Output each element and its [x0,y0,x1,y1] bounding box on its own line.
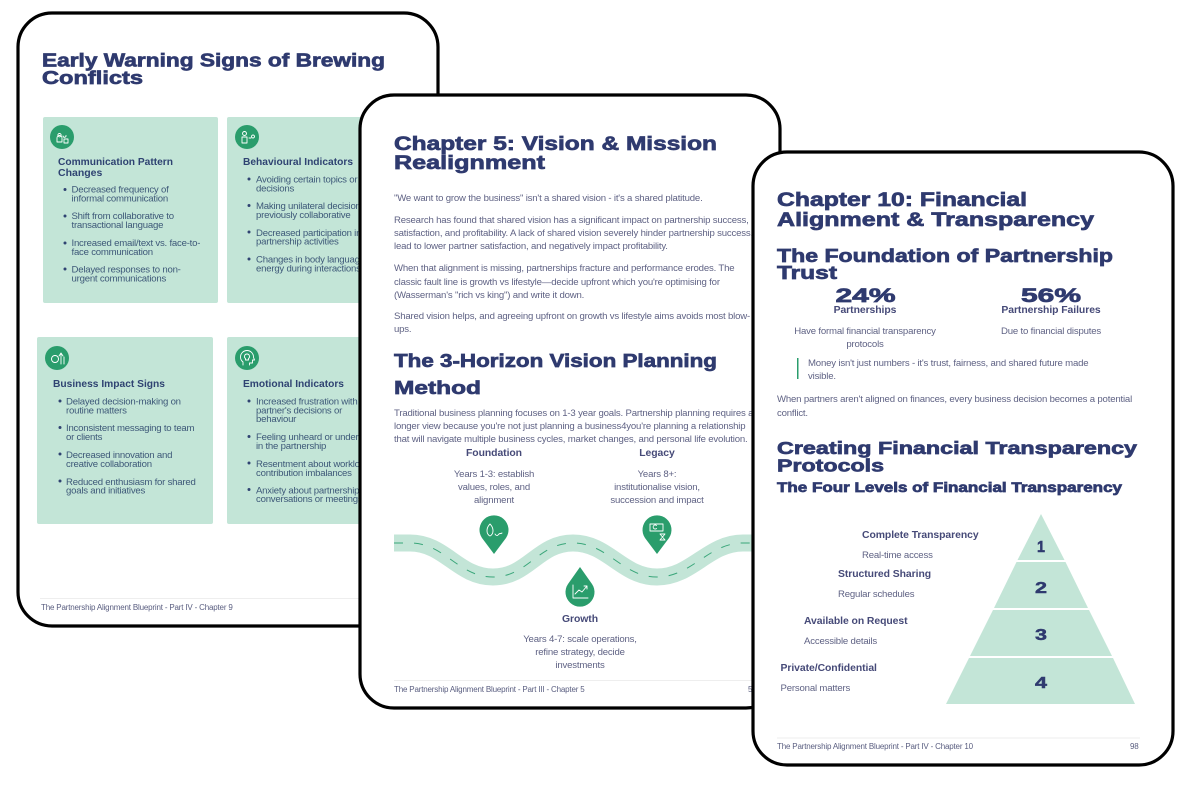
list: behavioural signs [256,174,366,274]
callout: money quote [797,358,1088,382]
title: Early Warning Signs: Conflicts [42,67,143,88]
text block: introduction paragraphs: classic fault line is growth vs lifestyle—decide upfront which you're optimising for [394,277,721,288]
footer: page 3: The Partnership Alignment Blueprint - Part IV - Chapter 10 [777,742,974,751]
footer: page 3: 98 [1130,742,1139,751]
list: business impact signs: goals and initiatives [66,486,146,496]
chart: transparency pyramid: 3 [1035,627,1047,644]
milestone: Legacy [610,448,704,554]
title: Chapter 10 [777,189,1094,231]
list: business impact signs: routine matters [66,406,127,416]
text block: planning method: Traditional business planning focuses on 1-3 year goals. Partnership planning requires a [394,408,754,419]
list: business impact signs: or clients [66,432,103,443]
milestone: Legacy: succession and impact [610,495,704,506]
milestone: Growth: Years 4-7: scale operations, [523,634,637,645]
chart: transparency pyramid: 2 [1035,580,1047,597]
milestone: Foundation [454,448,534,554]
heading: Foundation of Partnership Trust [777,245,1113,283]
label: level 1: Complete Transparency [862,530,979,541]
milestone: Foundation: Foundation [466,448,522,459]
label: level 2: Regular schedules [838,589,915,600]
list: behavioural signs: Making unilateral decisions [256,201,366,212]
icon: coin and arrow [45,346,69,370]
label: level 2 [838,569,931,600]
label: level 4: Personal matters [780,683,851,694]
stat: 56% partnership failures: Due to financial disputes [1001,326,1101,337]
list: communication signs: face communication [72,247,153,258]
list: emotional signs: Resentment about workload [256,459,370,470]
milestone: Growth [523,567,637,671]
title: Early Warning Signs [42,50,385,88]
text block: introduction paragraphs: (Wasserman's "rich vs king") and write it down. [394,290,584,301]
label: level 1 [862,530,979,561]
stat: 24% partnerships [794,285,936,350]
footer: page 2: 58 [748,685,757,694]
list: communication signs: Shift from collaborative to [72,211,174,222]
card: Business Impact Signs [37,337,213,524]
text block: finance alignment [777,394,1132,419]
footer: page 1: The Partnership Alignment Blueprint - Part IV - Chapter 9 [41,603,233,612]
stat: 24% partnerships: Have formal financial transparency [794,326,936,337]
panel: page 3, Chapter 10 Financial Alignment [753,152,1173,765]
list: communication signs: Delayed responses to non- [72,264,181,276]
card: Emotional Indicators [227,337,403,524]
chart: transparency pyramid [946,514,1135,704]
icon: person with gear [235,125,259,149]
title: Chapter 5: Chapter 5: Vision & Mission [394,133,717,155]
list: emotional signs [256,396,385,505]
list: communication signs: informal communication [72,194,168,204]
heading: 3-Horizon method: Method [394,377,481,398]
chart: transparency pyramid: 4 [1035,675,1047,692]
callout: money quote: Money isn't just numbers - it's trust, fairness, and shared future made [808,358,1088,369]
card: Behavioural Indicators [227,117,403,303]
list: behavioural signs: previously collaborative [256,210,350,221]
heading: 3-Horizon method: The 3-Horizon Vision Planning [394,350,717,371]
list: emotional signs: Increased frustration with [256,396,357,408]
list: emotional signs: Feeling unheard or undervalued [256,432,385,443]
stat: 24% partnerships: Partnerships [834,305,897,316]
milestone: Growth: refine strategy, decide [535,647,625,658]
card: Communication Pattern Changes: Communication Pattern [58,156,173,168]
milestone: Growth: Growth [562,614,598,625]
milestone: Legacy: Years 8+: [638,469,676,480]
heading: Foundation of Partnership Trust: The Foundation of Partnership [777,245,1113,266]
list: behavioural signs: energy during interactions [256,264,361,274]
footer: page 2 [394,685,757,694]
card: Business Impact Signs: Business Impact Signs [53,378,165,390]
label: level 3 [804,616,908,647]
footer: page 3 [777,742,1139,751]
milestone: Legacy: Legacy [639,448,675,459]
list: emotional signs: Anxiety about partnership [256,486,359,496]
title: Chapter 10: Chapter 10: Financial [777,189,1027,211]
text block: finance alignment: conflict. [777,408,808,419]
heading: Creating Financial Transparency Protocols [777,438,1137,476]
icon: money and hourglass map pin [642,515,671,554]
chart: winding road timeline [394,543,770,577]
heading: Creating Financial Transparency Protocols: Creating Financial Transparency [777,438,1137,458]
title: Chapter 5 [394,133,717,174]
title: Early Warning Signs: Early Warning Signs of Brewing [42,50,385,71]
label: level 4: Private/Confidential [780,663,877,674]
milestone: Foundation: values, roles, and [458,482,530,493]
footer: page 2: The Partnership Alignment Blueprint - Part III - Chapter 5 [394,685,585,694]
text block: introduction paragraphs: Shared vision helps, and agreeing upfront on growth vs lifestyle aims avoids most blow- [394,311,750,322]
heading: Four Levels: The Four Levels of Financial Transparency [777,480,1123,495]
card: Emotional Indicators: Emotional Indicators [243,378,344,390]
list: communication signs: urgent communications [72,274,166,284]
panel: page 1, Early Warning Signs [18,13,438,626]
text block: planning method: longer view because you're not just planning a business4you're planning a relationship [394,421,745,432]
text block: introduction paragraphs: When that alignment is missing, partnerships fracture and performance erodes. The [394,263,734,274]
list: communication signs: transactional language [72,220,163,231]
title: Chapter 5: Realignment [394,152,546,174]
text block: finance alignment: When partners aren't aligned on finances, every business decision becomes a potential [777,394,1132,405]
text block: introduction paragraphs: "We want to grow the business" isn't a shared vision - it's a shared platitude. [394,193,703,204]
stat: 56% partnership failures: 56% [1021,285,1081,307]
list: emotional signs: partner's decisions or [256,406,343,416]
list: emotional signs: conversations or meetings [256,494,363,505]
list: emotional signs: contribution imbalances [256,468,352,479]
heading: Creating Financial Transparency Protocols: Protocols [777,456,884,476]
list: behavioural signs: Avoiding certain topics or [256,174,358,186]
callout: money quote: visible. [808,371,836,382]
icon: chart droplet [566,567,594,607]
text block: introduction paragraphs: satisfaction, and profitability. A lack of shared vision severely hinder partnership success, [394,228,753,239]
list: behavioural signs: partnership activities [256,236,339,248]
label: level 4 [780,663,877,694]
list: emotional signs: behaviour [256,414,297,425]
card: Behavioural Indicators: Behavioural Indicators [243,156,353,168]
list: emotional signs: in the partnership [256,441,326,452]
list: business impact signs: Decreased innovation and [66,450,172,461]
milestone: Foundation: alignment [474,495,515,506]
list: communication signs: Increased email/text vs. face-to- [72,238,200,249]
card: Communication Pattern Changes [43,117,218,303]
stat: 24% partnerships: 24% [836,285,896,307]
stat: 56% partnership failures: Partnership Failures [1001,305,1101,316]
stat: 56% partnership failures [1001,285,1101,337]
card: Communication Pattern Changes: Changes [58,167,103,179]
icon: people talking [50,125,74,149]
chart: transparency pyramid: 1 [1037,539,1045,556]
label: level 3: Available on Request [804,616,908,627]
label: level 2: Structured Sharing [838,569,931,580]
icon: leaf map pin [480,515,508,554]
text block: introduction paragraphs: Research has found that shared vision has a significant impact on partnership success, [394,215,749,226]
heading: 3-Horizon method [394,350,717,398]
list: behavioural signs: Decreased participation in [256,228,361,239]
title: Chapter 10: Alignment & Transparency [777,209,1094,231]
milestone: Legacy: institutionalise vision, [614,482,700,493]
icon: head with bulb [235,346,259,370]
text block: introduction paragraphs: ups. [394,324,411,335]
label: level 3: Accessible details [804,636,877,647]
list: behavioural signs: decisions [256,184,294,194]
text block: introduction paragraphs [394,193,753,335]
label: level 1: Real-time access [862,550,933,561]
list: communication signs: Decreased frequency of [72,184,169,196]
list: communication signs [72,184,200,284]
list: business impact signs: Reduced enthusiasm for shared [66,477,196,488]
list: business impact signs: Delayed decision-making on [66,396,181,408]
milestone: Growth: investments [555,660,605,671]
list: behavioural signs: Changes in body language [256,254,365,266]
list: business impact signs [66,396,196,496]
text block: planning method [394,408,754,445]
panel: page 2, Chapter 5 Vision and Mission [360,95,780,708]
text block: introduction paragraphs: lead to lower partner satisfaction, and negatively impact profitability. [394,241,668,252]
milestone: Foundation: Years 1-3: establish [454,469,534,480]
stat: 24% partnerships: protocols [846,339,884,350]
list: business impact signs: Inconsistent messaging to team [66,423,195,434]
heading: Foundation of Partnership Trust: Trust [777,262,837,283]
list: business impact signs: creative collaboration [66,459,152,470]
text block: planning method: that will navigate multiple business cycles, market changes, and personal life evolution. [394,434,748,445]
